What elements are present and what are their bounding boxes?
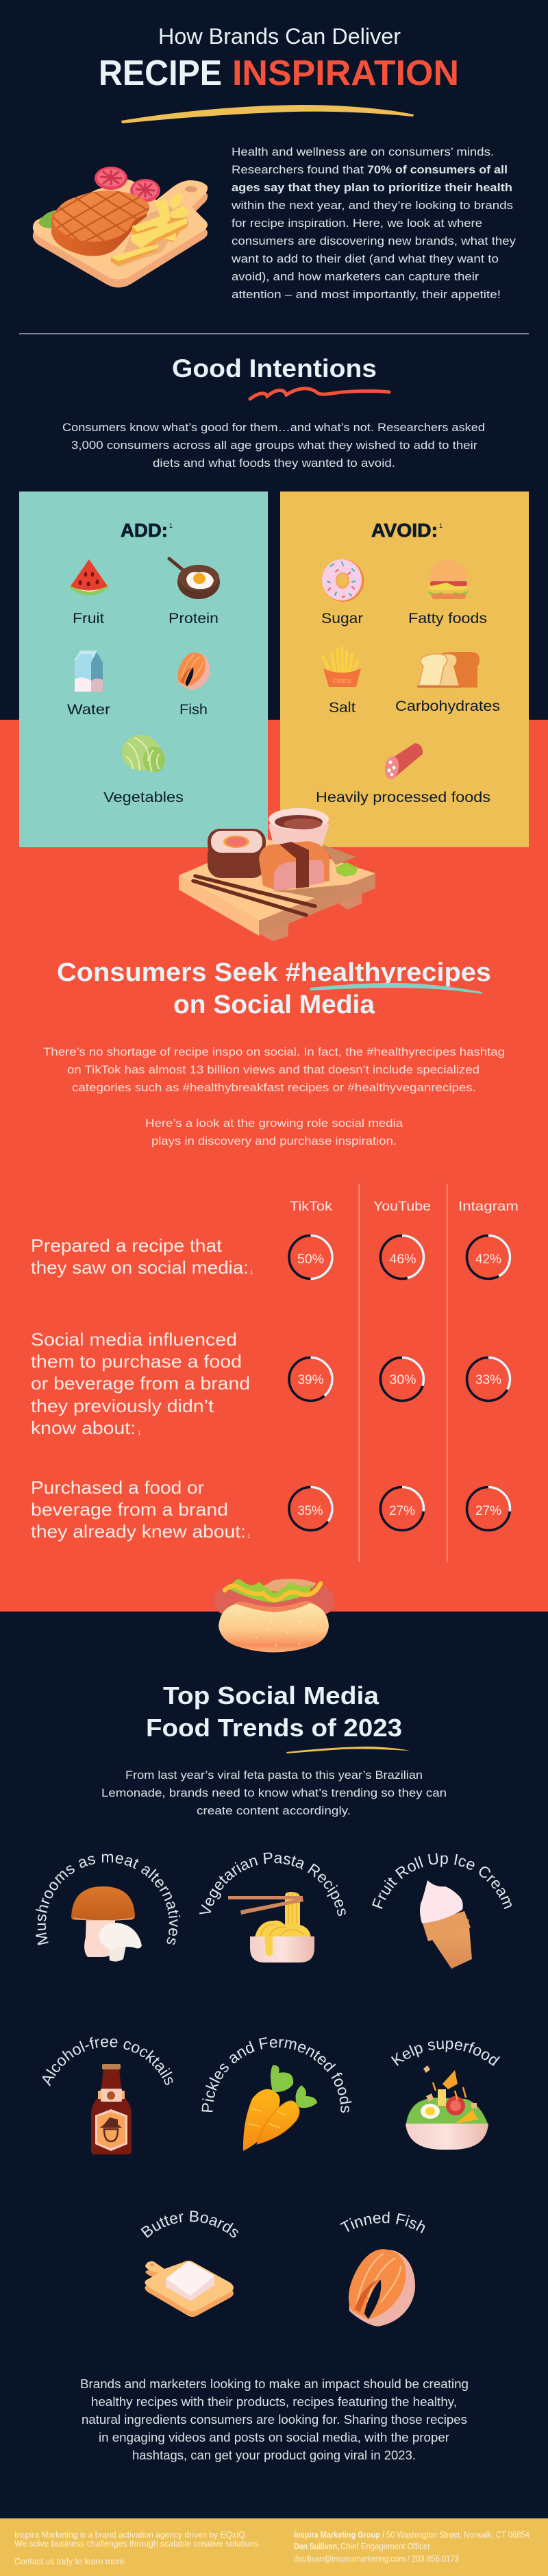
- row 3 donuts: 27%: [475, 1504, 501, 1518]
- paragraph: recipe inspo: categories such as #healthybreakfast recipes or #healthyveganrecipes.: [72, 1081, 476, 1094]
- curved label: Vegetarian Pasta Recipes: [199, 1852, 346, 1917]
- intro paragraph: Researchers found that: [232, 163, 364, 176]
- heading: top social media food trends: Food Trends of 2023: [146, 1714, 402, 1742]
- heading: ADD: ADD:: [121, 520, 168, 541]
- label: Fruit: Fruit: [73, 611, 104, 627]
- table: social media chart: [31, 1184, 519, 1562]
- icon: burger: [427, 560, 469, 599]
- trend: ice cream: [372, 1853, 512, 1969]
- paragraph: recipe inspo: Here’s a look at the growing role social media: [145, 1117, 403, 1130]
- footer: about text: Inspira Marketing is a brand activation agency driven by EQxIQ.: [14, 2530, 247, 2540]
- red squiggle underline: [250, 389, 389, 399]
- icon: hot dog: [214, 1579, 334, 1652]
- heading: consumers seek healthy recipes: [57, 958, 491, 1019]
- paragraph: trends intro: create content accordingly.: [197, 1804, 351, 1817]
- label: Fish: Fish: [179, 702, 208, 718]
- footer: about text: Contact us tody to learn more.: [14, 2557, 127, 2566]
- intro paragraph: attention – and most importantly, their appetite!: [232, 288, 501, 301]
- heading: consumers seek healthy recipes: Consumers Seek #healthyrecipes: [57, 958, 491, 987]
- panel: add: [19, 491, 268, 847]
- row 1 label: 1: [250, 1269, 253, 1276]
- heading: top social media food trends: [146, 1681, 402, 1742]
- intro paragraph: ages say that they plan to prioritize their health: [232, 181, 512, 194]
- trend: pasta: [199, 1852, 346, 1963]
- row 1 label: Prepared a recipe that: [31, 1235, 223, 1256]
- label: Water: Water: [67, 702, 110, 718]
- row 2 donuts: 33%: [475, 1373, 501, 1387]
- row 1 label: [31, 1235, 253, 1278]
- row 2 label: they previously didn’t: [31, 1396, 214, 1416]
- row 2 label: 1: [138, 1430, 141, 1436]
- curved label: Alcohol-free cocktails: [42, 2037, 173, 2087]
- paragraph: recipe inspo: plays in discovery and purchase inspiration.: [151, 1134, 397, 1147]
- row 3 donuts: [289, 1487, 510, 1530]
- paragraph: trends intro: [101, 1769, 447, 1817]
- trend: kelp superfood: [390, 2040, 500, 2150]
- paragraph: closing: [80, 2377, 469, 2462]
- paragraph: recipe inspo: There’s no shortage of recipe inspo on social. In fact, the #healthyrecipes hashtag: [43, 1045, 505, 1058]
- intro paragraph: for recipe inspiration. Here, we look at where: [232, 217, 482, 230]
- icon: salad bowl: [406, 2065, 488, 2150]
- heading: AVOID: 1: [439, 522, 443, 529]
- icon: fries: FRIES: [333, 678, 351, 685]
- icon: steak on cutting board: [33, 167, 208, 288]
- column headers: [290, 1200, 519, 1214]
- heading: ADD: 1: [169, 522, 173, 529]
- paragraph: closing: Brands and marketers looking to make an impact should be creating: [80, 2377, 469, 2391]
- row 3 label: 1: [247, 1533, 251, 1540]
- heading: consumers seek healthy recipes: on Social Media: [173, 991, 375, 1019]
- paragraph: closing: in engaging videos and posts on social media, with the proper: [99, 2431, 449, 2444]
- yellow brush underline: [286, 1747, 410, 1753]
- label: Vegetables: Vegetables: [103, 790, 184, 805]
- paragraph: trends intro: Lemonade, brands need to know what’s trending so they can: [101, 1786, 447, 1799]
- icon: salmon steak large: [349, 2249, 415, 2326]
- label: Heavily processed foods: Heavily processed foods: [316, 790, 490, 805]
- footer: contact text: 50 Washington Street, Norwalk, CT 06854: [386, 2530, 530, 2540]
- label: Carbohydrates: Carbohydrates: [395, 698, 500, 714]
- paragraph: good intentions intro: 3,000 consumers across all age groups what they wished to add to their: [71, 439, 477, 452]
- row 3 label: beverage from a brand: [31, 1499, 228, 1520]
- title: RECIPE: [99, 53, 222, 93]
- row 2 label: Social media influenced: [31, 1329, 237, 1350]
- heading: AVOID: AVOID:: [371, 520, 438, 541]
- column headers: TikTok: [290, 1200, 333, 1214]
- icon: watermelon: [69, 559, 109, 595]
- background: red social media band: [0, 720, 548, 1612]
- row 1 donuts: 46%: [389, 1252, 416, 1267]
- footer: contact text: Dan Sullivan,: [294, 2542, 339, 2551]
- row 3 label: [31, 1477, 251, 1542]
- row 2 label: know about:: [31, 1418, 136, 1438]
- intro paragraph: within the next year, and they’re looking to brands: [231, 199, 513, 212]
- icon: butter board: [145, 2261, 234, 2317]
- paragraph: recipe inspo: [43, 1045, 505, 1147]
- row 3 label: Purchased a food or: [31, 1477, 204, 1498]
- paragraph: closing: hashtags, can get your product going viral in 2023.: [132, 2449, 416, 2462]
- paragraph: good intentions intro: diets and what foods they wanted to avoid.: [153, 457, 395, 470]
- icon: salami: [384, 743, 423, 780]
- curved label: Butter Boards: [141, 2211, 238, 2238]
- row 3 label: they already knew about:: [31, 1521, 246, 1542]
- icon: bottle: [91, 2064, 132, 2154]
- row 3 donuts: 35%: [297, 1504, 323, 1518]
- footer: [0, 2518, 548, 2576]
- paragraph: trends intro: From last year’s viral feta pasta to this year’s Brazilian: [125, 1769, 423, 1782]
- intro paragraph: avoid), and how marketers can capture their: [232, 270, 479, 283]
- icon: cabbage: [122, 735, 165, 773]
- intro paragraph: want to add to their diet (and what they want to: [231, 252, 499, 265]
- intro paragraph: Health and wellness are on consumers’ minds.: [232, 145, 494, 158]
- trend: butter boards: [141, 2211, 238, 2317]
- icon: pasta bowl: [228, 1892, 314, 1963]
- paragraph: recipe inspo: on TikTok has almost 13 billion views and that doesn’t include specialized: [67, 1063, 480, 1076]
- icon: bread loaf: [417, 652, 480, 688]
- yellow brush underline: [121, 105, 414, 123]
- icon: ice cream cone: [420, 1880, 472, 1969]
- curved label: Kelp superfood: [390, 2040, 500, 2066]
- footer: contact text: Inspira Marketing Group /: [294, 2530, 384, 2540]
- icon: frying pan with egg: [169, 559, 220, 599]
- icon: salmon steak: [177, 653, 210, 690]
- trend: tinned fish: [340, 2211, 425, 2326]
- intro paragraph: consumers are discovering new brands, what they: [232, 234, 516, 247]
- label: Fatty foods: Fatty foods: [408, 611, 487, 627]
- label: Salt: Salt: [329, 700, 356, 716]
- row 1 donuts: [289, 1235, 510, 1279]
- panel: avoid: [280, 491, 529, 847]
- paragraph: closing: healthy recipes with their products, recipes featuring the healthy,: [91, 2395, 457, 2409]
- row 2 donuts: 30%: [389, 1373, 416, 1387]
- footer: contact text: dsullivan@inspiramarketing.com / 203.856.0173: [294, 2554, 459, 2564]
- footer: contact text: Chief Engagement Officer: [340, 2542, 430, 2551]
- row 3 donuts: 27%: [389, 1504, 415, 1518]
- trend: cocktails: [42, 2037, 173, 2154]
- trend: mushrooms: [36, 1854, 181, 1962]
- title: [99, 24, 459, 93]
- column headers: Intagram: [458, 1200, 519, 1214]
- footer: about text: We solve business challenges through scalable creative solutions.: [14, 2539, 261, 2549]
- row 1 label: they saw on social media:: [31, 1257, 249, 1278]
- curved label: Tinned Fish: [340, 2211, 425, 2233]
- curved label: Pickles and Fermented foods: [201, 2037, 352, 2113]
- row 2 donuts: [289, 1357, 510, 1401]
- title: How Brands Can Deliver: [158, 24, 401, 49]
- label: Sugar: Sugar: [321, 611, 363, 627]
- label: Protein: Protein: [169, 611, 219, 627]
- curved label: Fruit Roll Up Ice Cream: [372, 1853, 512, 1909]
- icon: fries: [323, 648, 361, 687]
- intro paragraph: 70% of consumers of all: [367, 163, 508, 176]
- row 2 label: them to purchase a food: [31, 1351, 242, 1372]
- intro paragraph: [231, 145, 516, 301]
- paragraph: closing: natural ingredients consumers are looking for. Sharing those recipes: [82, 2413, 467, 2427]
- teal brush underline: [310, 983, 482, 994]
- row 2 label: [31, 1329, 250, 1438]
- trend: pickles: [201, 2037, 352, 2151]
- title: INSPIRATION: [232, 53, 459, 93]
- heading: Good Intentions: Good Intentions: [172, 354, 377, 382]
- curved label: Mushrooms as meat alternatives: [36, 1854, 181, 1945]
- column headers: YouTube: [373, 1200, 431, 1214]
- icon: donut: [322, 559, 364, 602]
- row 2 donuts: 39%: [297, 1373, 324, 1387]
- row 1 donuts: 50%: [297, 1252, 324, 1267]
- icon: sushi board: [179, 808, 375, 941]
- row 2 label: or beverage from a brand: [31, 1373, 250, 1394]
- footer: about text: [14, 2530, 261, 2566]
- icon: mushrooms: [71, 1886, 142, 1962]
- paragraph: good intentions intro: [62, 421, 485, 470]
- icon: milk carton: [75, 651, 103, 692]
- row 1 donuts: 42%: [475, 1252, 501, 1267]
- footer: contact text: [294, 2530, 530, 2564]
- paragraph: good intentions intro: Consumers know what’s good for them…and what’s not. Researchers asked: [62, 421, 485, 434]
- icon: carrots: [243, 2065, 317, 2151]
- heading: top social media food trends: Top Social Media: [163, 1681, 379, 1710]
